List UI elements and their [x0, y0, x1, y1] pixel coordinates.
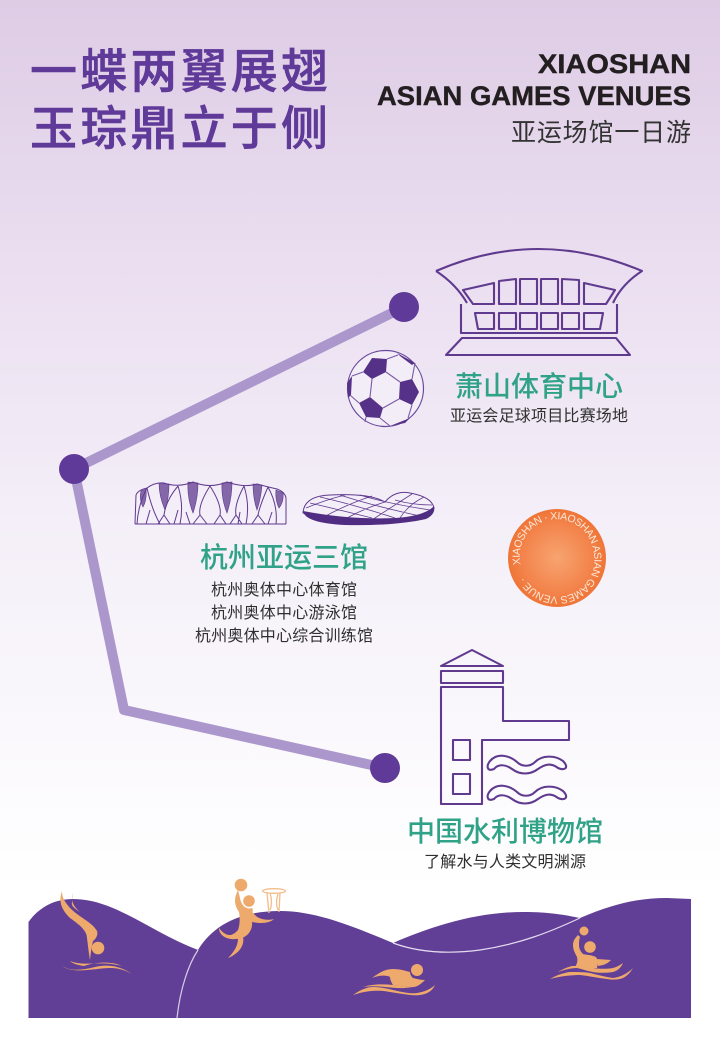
icon: Xiaoshan stadium [436, 249, 642, 355]
title: 一蝶两翼展翅 [30, 45, 328, 98]
English heading [377, 49, 691, 111]
English heading: XIAOSHAN [538, 49, 691, 79]
venue description: 了解水与人类文明渊源 [424, 853, 586, 871]
venue description: 亚运会足球项目比赛场地 [450, 406, 628, 425]
venue heading: Hangzhou venues: 杭州亚运三馆 [200, 542, 368, 573]
venue description lines: 杭州奥体中心综合训练馆 [195, 627, 373, 645]
icon: Olympic gymnasium [135, 482, 286, 524]
icon: diver [60, 891, 132, 974]
title: 玉琮鼎立于侧 [30, 102, 328, 155]
icon: swimming arena [303, 492, 434, 525]
icon: soccer ball [347, 350, 424, 426]
venue description lines: 杭州奥体中心体育馆 [211, 581, 357, 599]
icon: swimmer [353, 964, 435, 995]
icon: water museum [441, 650, 569, 804]
venue heading: museum: 中国水利博物馆 [407, 816, 603, 847]
title [30, 45, 328, 155]
purple hills [28, 898, 691, 1018]
English heading: ASIAN GAMES VENUES [377, 81, 691, 111]
venue description lines [195, 581, 373, 645]
route nodes [59, 292, 419, 783]
venue heading: Xiaoshan: 萧山体育中心 [455, 371, 623, 402]
venue description lines: 杭州奥体中心游泳馆 [211, 604, 357, 622]
subtitle: 亚运场馆一日游 [511, 119, 691, 147]
badge: Xiaoshan venue: XIAOSHAN · XIAOSHAN ASIAN GAMES VENUE · [512, 512, 602, 604]
icon: basketball player [219, 879, 286, 958]
route line [74, 307, 404, 768]
icon: water polo player [550, 926, 633, 980]
